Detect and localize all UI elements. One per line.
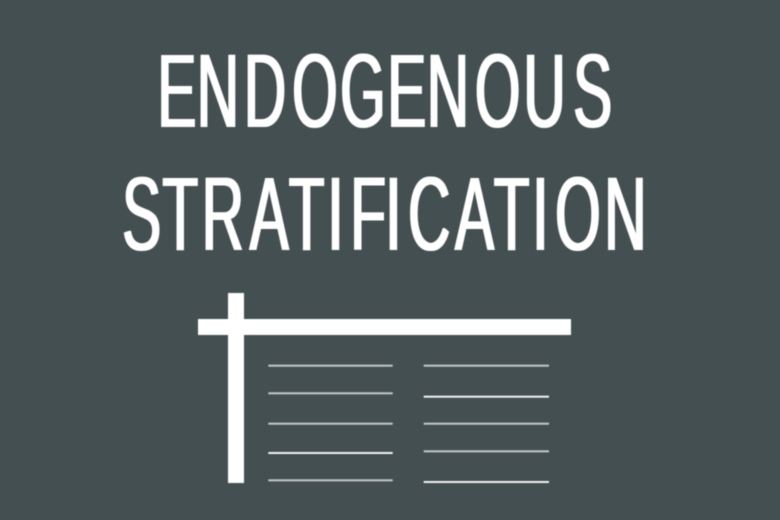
right column lines xyxy=(424,365,549,483)
title xyxy=(122,32,647,272)
title line 2: STRATIFICATION xyxy=(122,155,647,272)
table horizontal bar xyxy=(198,319,571,335)
table vertical bar xyxy=(228,293,244,483)
icon: stratification table xyxy=(198,293,571,483)
title line 1: ENDOGENOUS xyxy=(157,32,612,149)
left column lines xyxy=(268,365,393,481)
